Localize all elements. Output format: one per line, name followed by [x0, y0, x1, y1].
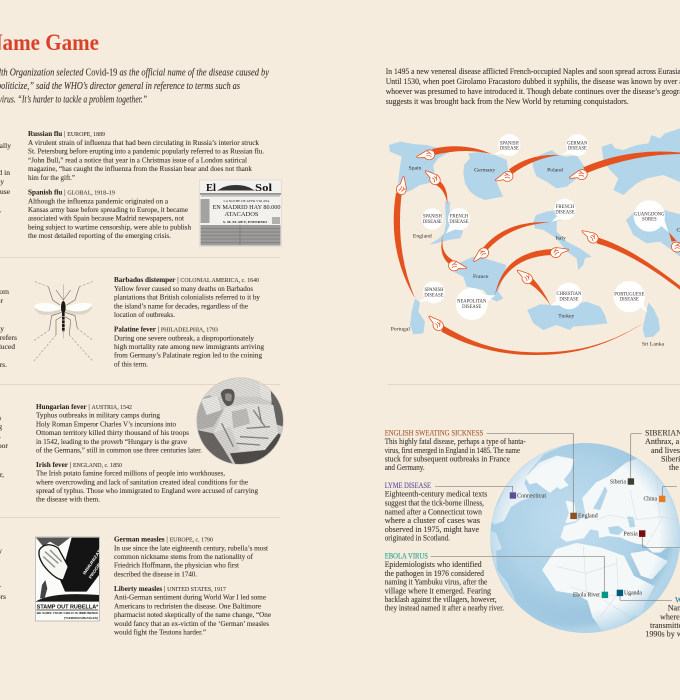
- Irish fever entry: spread of typhus. Those who immigrated to England were accused of carrying: [36, 486, 258, 495]
- callout: Ebola virus: the pathogen in 1976 considered: [385, 569, 484, 578]
- dividers: [0, 258, 680, 518]
- Palatine fever entry: Palatine fever | PHILADELPHIA, 1793: [114, 324, 218, 334]
- callout: Ebola virus: [385, 551, 604, 613]
- bubble: Christian disease: [551, 283, 582, 309]
- intro text: naming of Covid-19: politicize,” said the WHO’s director general in reference to terms such as: [0, 81, 240, 92]
- disease name bubbles, lower map: [419, 208, 647, 320]
- image: El Sol newspaper: [200, 180, 282, 246]
- image: Stamp Out Rubella poster: [35, 537, 107, 621]
- Russian flu entry: A virulent strain of influenza that had been circulating in Russia’s interior struck: [28, 138, 259, 147]
- marker: Siberia: Siberia: [610, 478, 626, 485]
- Caspian sea: [627, 517, 635, 527]
- image: El Sol newspaper: Sol: [255, 183, 272, 194]
- callout: English sweating sickness: This highly fatal disease, perhaps a type of hanta-: [385, 437, 526, 446]
- Barbados distemper entry: location of outbreaks.: [114, 310, 175, 319]
- callout: Lyme disease: suggest that the tick-borne illness,: [385, 498, 484, 507]
- bubble: Spanish disease: DISEASE: [500, 147, 519, 152]
- Hungarian fever entry: Hungarian fever | AUSTRIA, 1542: [36, 402, 132, 411]
- Hungarian fever entry: of the Germans,” still in common use three centuries later.: [36, 446, 202, 455]
- map: spread of syphilis names: [389, 128, 680, 355]
- German measles entry: common nickname stems from the nationality of: [114, 552, 253, 561]
- bubble: Neapolitan disease: NEAPOLITAN: [457, 300, 487, 305]
- image: Stamp Out Rubella poster: STAMP OUT RUBELLA*: [37, 604, 99, 610]
- Russian flu entry: magazine, “has caught the influenza from the Russian bear and does not thank: [28, 164, 252, 173]
- country labels, upper map: Germany: [474, 168, 495, 174]
- Liberty measles entry: would fancy that an ex-victim of the ‘German’ measles: [114, 619, 269, 628]
- Palatine fever entry: of this term.: [114, 359, 148, 368]
- image: engraving of a sick man in bed: [197, 377, 285, 467]
- callout: Ebola virus: naming it Yambuku virus, after the: [385, 578, 488, 587]
- image: El Sol newspaper: ATACADOS: [224, 211, 259, 218]
- Russian flu entry: “John Bull,” read a notice that year in a Christmas issue of a London satirical: [28, 155, 247, 164]
- Palatine fever entry: from Germany’s Palatinate region led to the coining: [114, 351, 262, 360]
- land masses: Spain, Germany, Poland, Russia: [389, 128, 680, 200]
- callout: Lyme disease: observed in 1975, might have: [385, 525, 479, 534]
- bubble: Spanish disease, Portugal: DISEASE: [424, 293, 444, 298]
- German measles entry: German measles | EUROPE, c. 1790: [114, 535, 213, 544]
- country labels, lower map: Turkey: [558, 313, 575, 319]
- image: Stamp Out Rubella poster: IMMUNIZATION: [82, 541, 107, 576]
- connector: China: [662, 486, 677, 496]
- marker: Persia: [624, 530, 645, 538]
- left column cropped text fragments: refers: [0, 333, 17, 342]
- bubble: Neapolitan disease: DISEASE: [462, 305, 481, 310]
- marker: China: China: [644, 496, 657, 503]
- syphilis intro text: [386, 66, 680, 106]
- land masses: England, France, Italy, Turkey, Portugal, Sri Lanka, China: [410, 202, 680, 338]
- landmass: Europe and Asia: [562, 455, 680, 552]
- left column cropped text fragments: [0, 141, 17, 601]
- Irish fever entry: The Irish potato famine forced millions of people into workhouses,: [36, 469, 225, 478]
- disease name bubbles, upper map: [494, 134, 668, 232]
- bubble: Spanish disease, England: DISEASE: [423, 220, 442, 225]
- Hungarian fever entry: Ottoman territory killed thirty thousand of his troops: [36, 428, 189, 437]
- marker: England: England: [578, 512, 598, 519]
- country labels, lower map: England: [413, 234, 432, 240]
- callout: Ebola virus: they instead named it after a nearby river.: [385, 604, 504, 613]
- German measles entry: Friedrich Hoffmann, the physician who first: [114, 561, 240, 570]
- bubble: Guangdong sores: SORES: [642, 218, 657, 223]
- callout: Ebola virus: village where it emerged. Fearing: [385, 586, 491, 595]
- bubble: Christian disease: DISEASE: [559, 297, 579, 302]
- Liberty measles entry: Americans to rechristen the disease. One Baltimore: [114, 601, 262, 610]
- bubble: Spanish disease, England: [422, 208, 443, 230]
- image: El Sol newspaper: El: [206, 183, 216, 194]
- arrows: tapered arcs from Spain, Germany, Poland and Russia: [394, 146, 680, 298]
- Russian flu entry: Russian flu | EUROPE, 1889: [28, 129, 105, 138]
- bubble: Christian disease: CHRISTIAN: [557, 292, 582, 297]
- callout: Ebola virus: EBOLA VIRUS: [385, 551, 428, 560]
- bubble: French disease: FRENCH: [556, 205, 575, 210]
- Spanish flu entry: the most detailed reporting of the emerging crisis.: [28, 231, 171, 240]
- icons: pointing hands, upper map: [396, 149, 588, 195]
- bubble: Guangdong sores: [634, 200, 668, 232]
- Irish fever entry: where overcrowding and lack of sanitation created ideal conditions for the: [36, 477, 249, 486]
- Barbados distemper entry: [114, 275, 260, 319]
- bubble: Spanish disease, Portugal: SPANISH: [425, 288, 444, 293]
- icons: pointing hands, lower map: [426, 227, 680, 333]
- image: El Sol newspaper: EN MADRID HAY 80.000: [212, 205, 280, 211]
- landmass: Greenland: [527, 457, 573, 492]
- country borders: [557, 477, 680, 617]
- country labels, lower map: Italy: [555, 236, 566, 242]
- marker: Uganda: [617, 589, 642, 596]
- marker: Uganda: Uganda: [624, 589, 642, 596]
- German measles entry: described the disease in 1740.: [114, 569, 197, 578]
- Liberty measles entry: Anti-German sentiment during World War I led some: [114, 593, 267, 602]
- Spanish flu entry: associated with Spain because Madrid newspapers, not: [28, 214, 185, 223]
- bubble: German disease: GERMAN: [567, 141, 588, 146]
- bubble: Spanish disease, England: SPANISH: [423, 215, 442, 220]
- callout: Siberian plague: [631, 428, 680, 478]
- callout: Ebola virus: backlash against the villagers, however,: [385, 595, 497, 604]
- bubble: French disease, England: DISEASE: [449, 220, 469, 225]
- country labels, upper map: [409, 165, 563, 174]
- bubble: Guangdong sores: GUANGDONG: [634, 212, 665, 217]
- intro text: naming of Covid-19: [0, 68, 269, 106]
- marker: Persia: Persia: [624, 531, 638, 538]
- Spanish flu entry: Kansas army base before spreading to Europe, it became: [28, 205, 189, 214]
- Liberty measles entry: pharmacist noted skeptically of the name change, “One: [114, 610, 272, 619]
- Black sea: [608, 526, 624, 535]
- image: El Sol newspaper: LA NOCHE DE AYER VIO AYA: [224, 199, 270, 203]
- callout: Lyme disease: LYME DISEASE: [385, 481, 431, 490]
- callout: English sweating sickness: ENGLISH SWEATING SICKNESS: [385, 428, 483, 437]
- landmass: North America: [491, 443, 567, 523]
- landmass: Iceland: [555, 481, 567, 488]
- callout: Ebola virus: Epidemiologists who identified: [385, 560, 482, 569]
- Palatine fever entry: [114, 324, 264, 368]
- Barbados distemper entry: the island’s name for decades, regardless of the: [114, 301, 249, 310]
- Liberty measles entry: would fight the Teutons harder.”: [114, 628, 206, 637]
- Hungarian fever entry: [36, 402, 202, 455]
- limb shading: [490, 443, 680, 633]
- bubble: French disease: DISEASE: [555, 210, 575, 215]
- bubble: French disease: [552, 199, 576, 222]
- callout: Lyme disease: named after a Connecticut town: [385, 507, 482, 516]
- Irish fever entry: Irish fever | ENGLAND, c. 1850: [36, 460, 122, 469]
- image: El Sol newspaper: S. M. EL REY, ENFERMO: [223, 220, 267, 224]
- panel: rubella entries: [35, 535, 272, 637]
- marker: England: [570, 512, 598, 519]
- callout: English sweating sickness: stuck for subsequent outbreaks in France: [385, 455, 510, 464]
- connector: Persia: [642, 537, 680, 547]
- Irish fever entry: the disease with them.: [36, 495, 100, 504]
- Spanish flu entry: Spanish flu | GLOBAL, 1918–19: [28, 188, 115, 196]
- panel: yellow fever entries: [33, 275, 264, 368]
- Hungarian fever entry: in 1542, leading to the proverb “Hungary is the grave: [36, 437, 188, 446]
- country labels, lower map: Portugal: [391, 327, 410, 333]
- callout: Lyme disease: where a cluster of cases was: [385, 516, 480, 525]
- marker: Ebola River: Ebola River: [573, 591, 601, 598]
- bubble: Portuguese disease: DISEASE: [620, 298, 639, 303]
- bubble: German disease: [562, 134, 588, 156]
- landmass: South America: [490, 532, 515, 607]
- Palatine fever entry: high mortality rate among new immigrants arriving: [114, 342, 264, 351]
- Spanish flu entry: [28, 188, 191, 240]
- image: Stamp Out Rubella poster: BE SURE YOUR CHILD IS IMMUNIZED: [37, 611, 99, 615]
- panel: influenza entries: [28, 129, 282, 246]
- Liberty measles entry: Liberty measles | UNITED STATES, 1917: [114, 584, 226, 593]
- Russian flu entry: him for the gift.”: [28, 173, 75, 182]
- country labels, upper map: Spain: [409, 165, 422, 171]
- German measles entry: In use since the late eighteenth century, rubella’s most: [114, 543, 269, 552]
- Irish fever entry: [36, 460, 258, 504]
- landmass: Britain: [567, 502, 576, 522]
- Barbados distemper entry: Yellow fever caused so many deaths on Barbados: [114, 284, 253, 293]
- Spanish flu entry: being subject to wartime censorship, were able to publish: [28, 222, 191, 231]
- bubble: Neapolitan disease: [456, 288, 495, 320]
- bubble: Portuguese disease: PORTUGUESE: [614, 292, 644, 297]
- callout: West Nile virus: [620, 596, 680, 639]
- globe: [490, 443, 680, 633]
- bubble: Spanish disease, Portugal: [419, 281, 445, 303]
- Barbados distemper entry: Barbados distemper | COLONIAL AMERICA, c. 1640: [114, 275, 259, 284]
- Russian flu entry: [28, 129, 264, 182]
- landmass: Africa and Arabia: [543, 544, 653, 630]
- Liberty measles entry: [114, 584, 272, 637]
- German measles entry: [114, 535, 269, 578]
- callout: Lyme disease: [385, 481, 513, 543]
- bubble: French disease, England: FRENCH: [450, 215, 469, 220]
- callout: English sweating sickness: [385, 428, 573, 513]
- country labels, lower map: France: [473, 274, 489, 280]
- callout: English sweating sickness: and Germany.: [385, 463, 425, 472]
- syphilis intro text: suggests it was brought back from the New World by returning conquistadors.: [386, 96, 629, 106]
- Russian flu entry: St. Petersburg before erupting into a pandemic popularly referred to as Russian flu.: [28, 147, 264, 156]
- callout: Lyme disease: Eighteenth-century medical texts: [385, 490, 487, 499]
- image: Stamp Out Rubella poster: PROGRAM: [88, 556, 106, 580]
- image: Stamp Out Rubella poster: (*GERMAN MEASLES): [64, 616, 98, 620]
- country labels, lower map: [391, 228, 680, 348]
- Barbados distemper entry: plantations that British colonialists referred to it by: [114, 293, 260, 302]
- illustration: mosquito: [33, 281, 94, 361]
- marker: Connecticut: Connecticut: [517, 492, 546, 499]
- callout: English sweating sickness: virus, first emerged in England in 1485. The name: [385, 446, 520, 455]
- country labels, lower map: Sri Lanka: [642, 342, 665, 348]
- bubble: Portuguese disease: [614, 281, 647, 312]
- bubble: Spanish disease: [494, 134, 520, 156]
- country labels, upper map: Poland: [547, 168, 563, 174]
- panel: typhus entries: [36, 377, 285, 504]
- Baltic sea: [593, 487, 607, 510]
- bubble: French disease, England: [446, 208, 470, 233]
- Hungarian fever entry: Typhus outbreaks in military camps during: [36, 411, 160, 420]
- Spanish flu entry: Although the influenza pandemic originated on a: [28, 196, 169, 205]
- Hungarian fever entry: Holy Roman Emperor Charles V’s incursions into: [36, 419, 176, 428]
- bubble: German disease: DISEASE: [568, 147, 587, 152]
- arrows: tapered arcs from France, Italy, Turkey, Portugal and Asia: [441, 222, 680, 355]
- Palatine fever entry: During one severe outbreak, a disproportionately: [114, 333, 254, 342]
- callout: Lyme disease: originated in Scotland.: [385, 534, 450, 543]
- bubble: Spanish disease: SPANISH: [500, 141, 519, 146]
